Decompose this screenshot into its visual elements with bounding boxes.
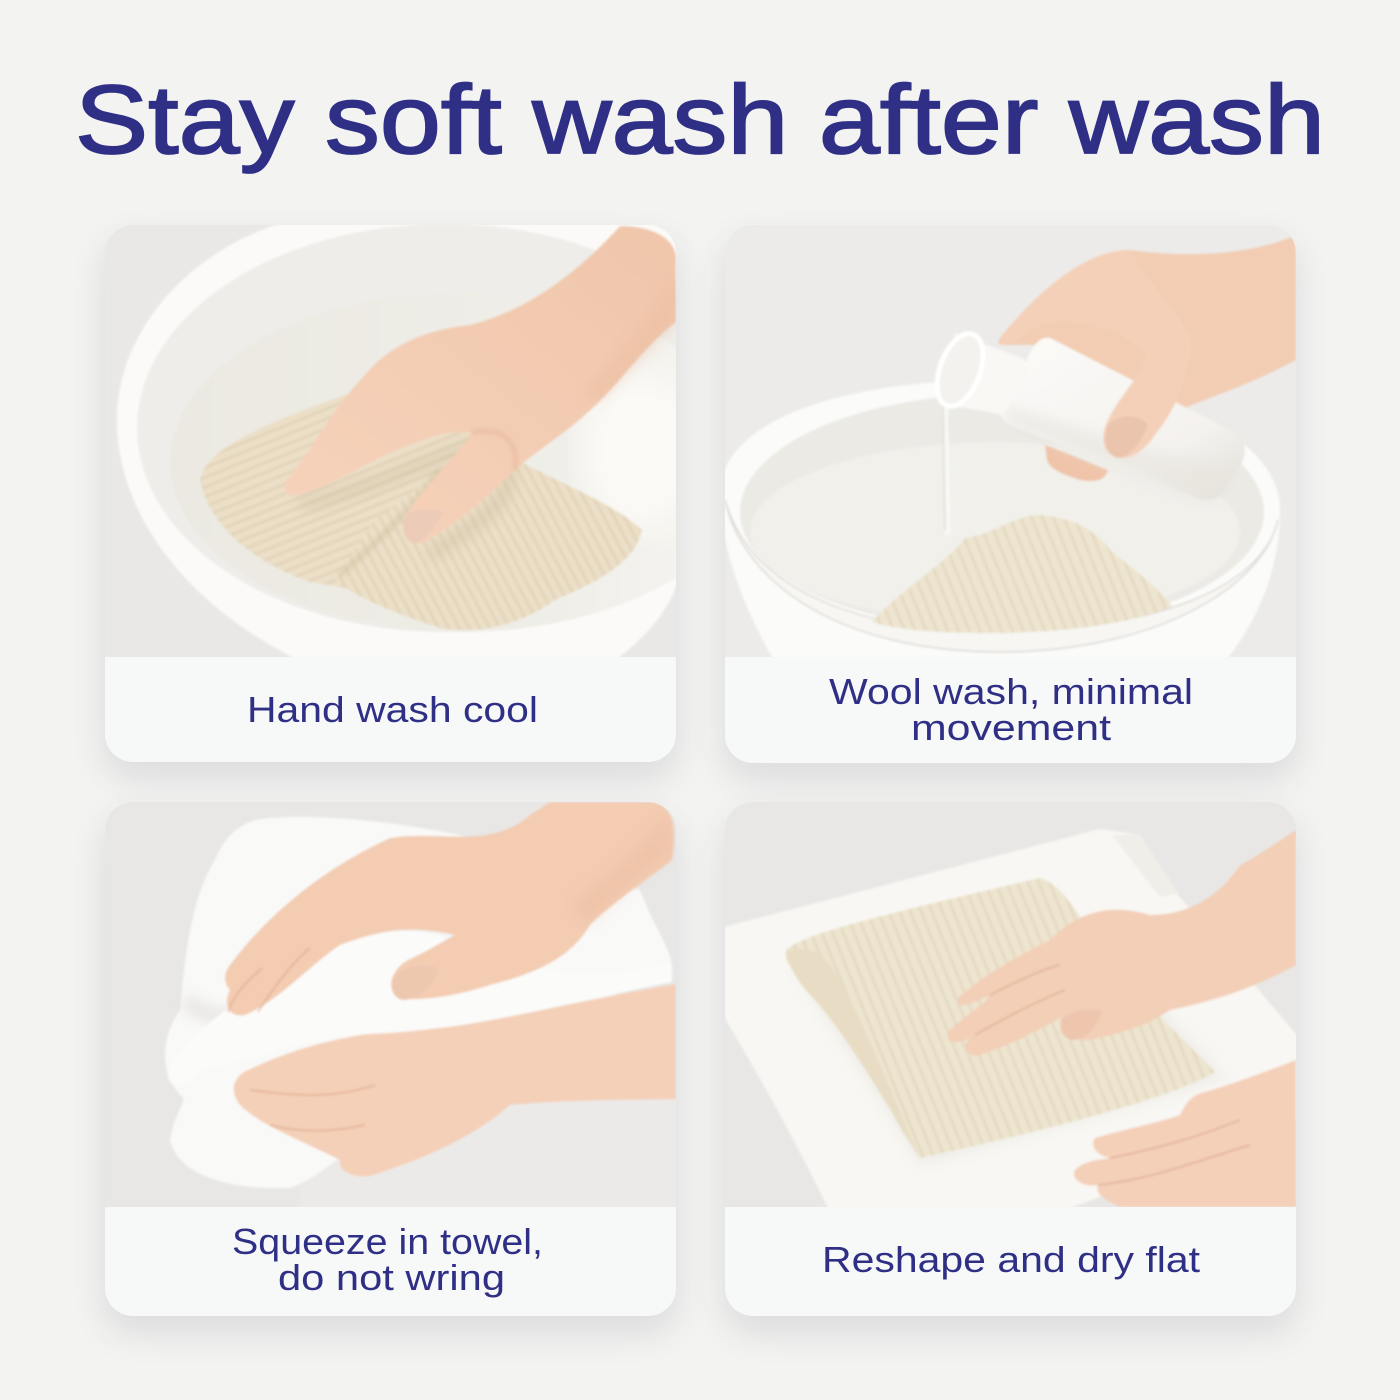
title: Stay soft wash after wash xyxy=(75,65,1325,174)
caption xyxy=(232,1221,543,1298)
caption: movement xyxy=(911,707,1111,748)
photo: pouring wool wash into bowl xyxy=(725,225,1296,657)
panel: hand wash cool xyxy=(105,225,676,762)
caption: Squeeze in towel, xyxy=(232,1221,543,1262)
caption: Wool wash, minimal xyxy=(829,671,1193,712)
photo: hands squeezing towel xyxy=(105,802,676,1207)
panel: squeeze in towel xyxy=(105,802,676,1316)
panel: wool wash xyxy=(725,225,1296,763)
caption: do not wring xyxy=(278,1257,505,1298)
caption: Reshape and dry flat xyxy=(822,1239,1200,1280)
photo: hand pressing knit in bowl of water xyxy=(105,225,676,657)
caption: Hand wash cool xyxy=(247,689,538,730)
panel: reshape and dry flat xyxy=(725,802,1296,1316)
photo: knit drying flat on towel xyxy=(725,802,1296,1207)
caption xyxy=(829,671,1193,748)
